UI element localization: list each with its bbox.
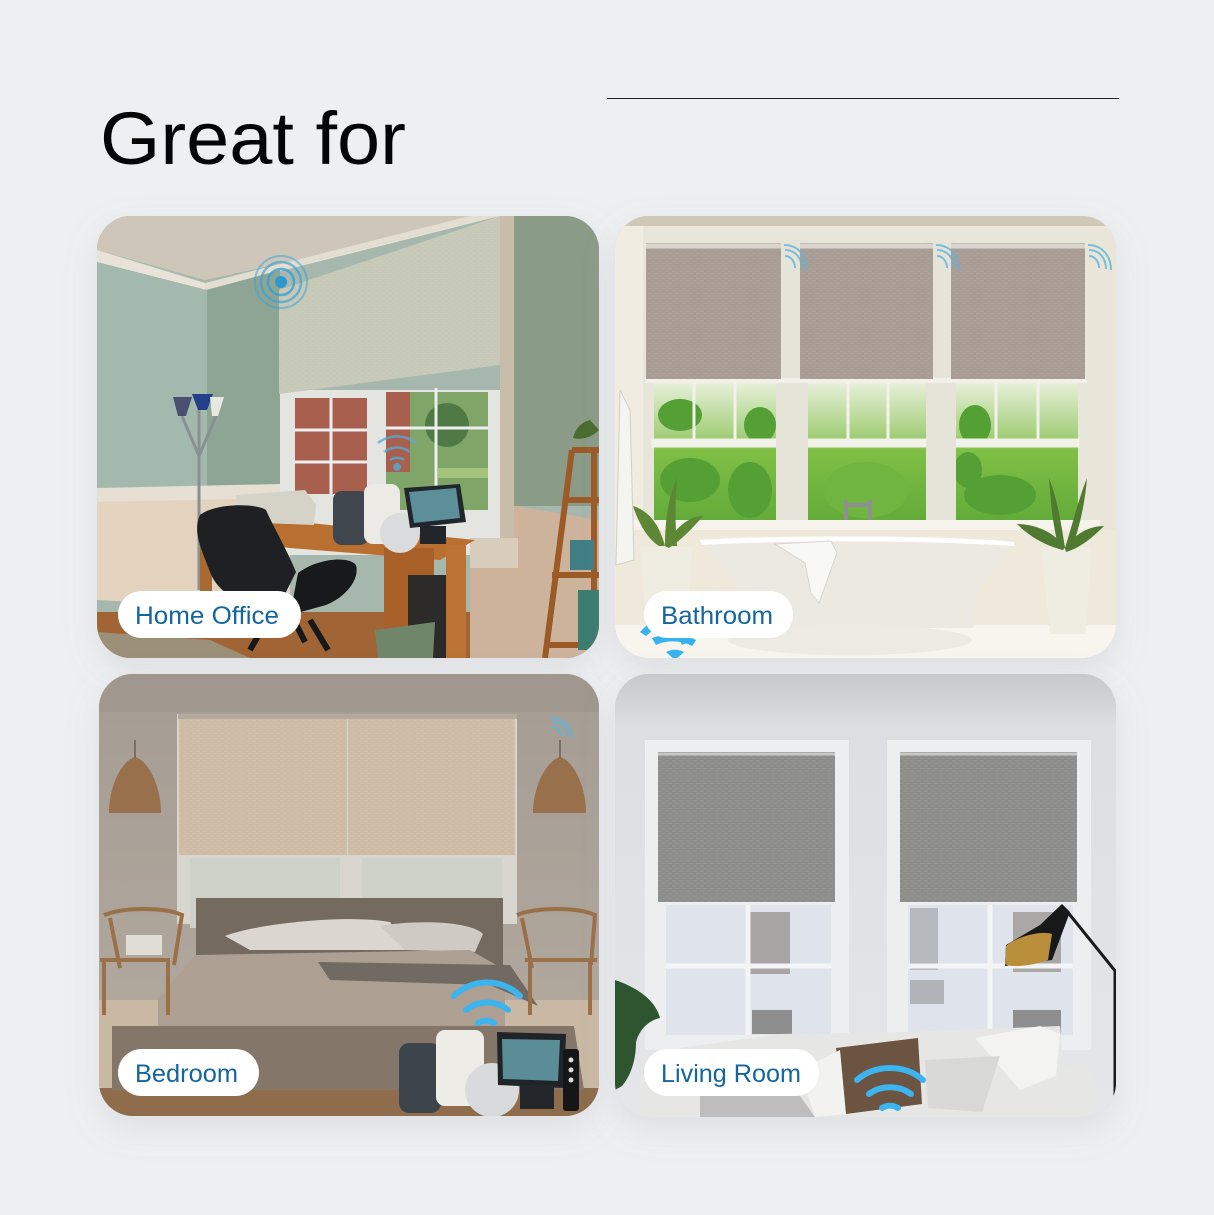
lamp <box>173 394 224 590</box>
chair <box>197 505 357 650</box>
bed <box>112 898 584 1090</box>
shades <box>658 752 1077 902</box>
panel: living room <box>615 674 1116 1118</box>
desk <box>200 522 475 658</box>
icon: wifi <box>640 624 696 660</box>
shade <box>279 216 500 394</box>
icons: signal arcs <box>784 245 1111 270</box>
icon: wifi <box>378 436 416 471</box>
panel: bedroom <box>99 674 599 1117</box>
floor <box>99 1000 599 1088</box>
icon: faint signal <box>551 718 572 738</box>
sofa <box>679 1026 1062 1117</box>
shelf <box>545 420 599 658</box>
printer <box>236 490 316 525</box>
label: bathroom: Bathroom <box>661 602 773 630</box>
title: Great for <box>100 97 406 180</box>
bathtub <box>700 500 1014 655</box>
smart devices <box>333 484 466 553</box>
shade <box>178 714 517 855</box>
shades <box>646 243 1085 379</box>
chairs <box>100 909 597 1015</box>
floor lamp <box>1005 904 1116 1117</box>
smart devices <box>399 1030 579 1117</box>
label: bedroom <box>118 1049 259 1096</box>
rug <box>97 632 250 658</box>
label: living room: Living Room <box>661 1060 801 1088</box>
pendant lamps <box>109 757 586 813</box>
plants <box>616 390 1104 634</box>
label: bedroom: Bedroom <box>135 1060 238 1088</box>
label: home office: Home Office <box>135 602 279 630</box>
panel: home office <box>97 216 599 658</box>
icon: signal rings <box>255 256 307 308</box>
window <box>177 714 517 924</box>
label: bathroom <box>644 591 793 638</box>
plant <box>615 980 660 1090</box>
panel: bathroom <box>615 216 1116 660</box>
icon: wifi <box>454 982 520 1023</box>
label: living room <box>644 1049 819 1096</box>
label: home office <box>118 591 301 638</box>
windows <box>666 905 1073 1035</box>
icon: wifi <box>857 1068 923 1108</box>
windows <box>634 378 1100 530</box>
